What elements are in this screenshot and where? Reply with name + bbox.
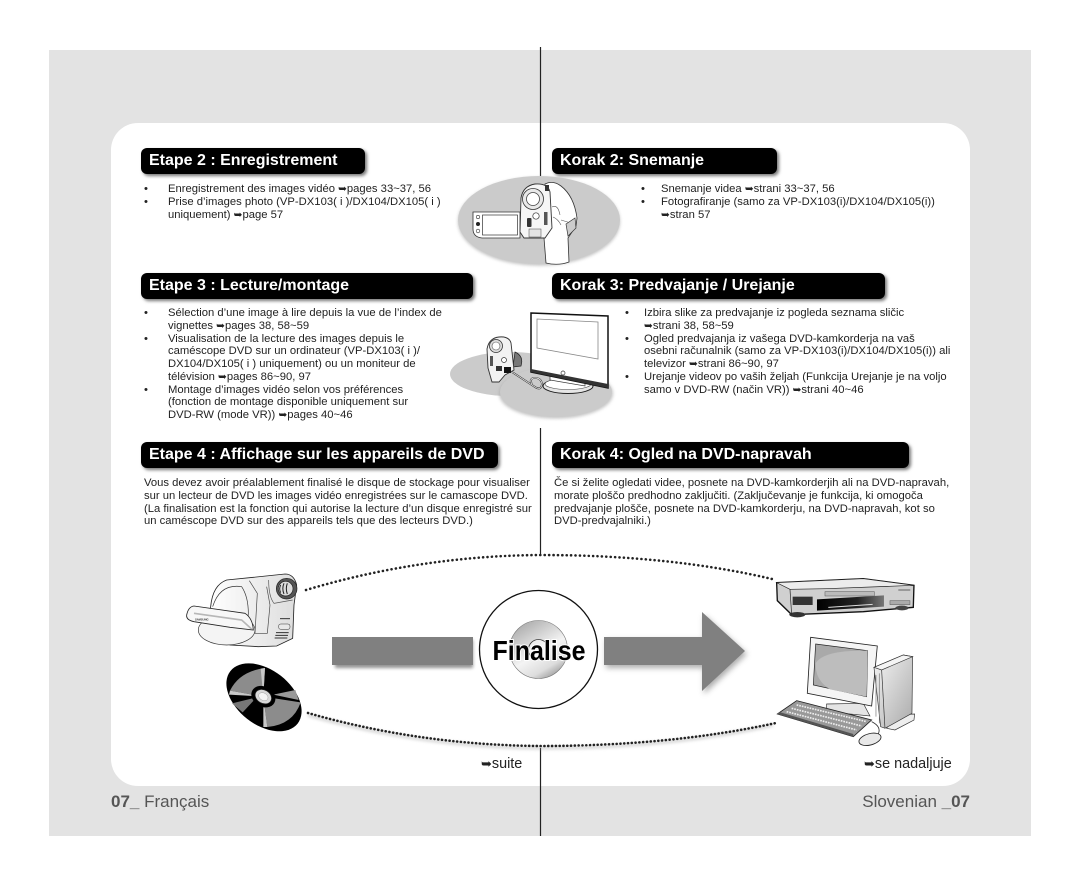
text: • xyxy=(641,183,645,195)
TV stand xyxy=(543,378,593,394)
heading: Etape 3 xyxy=(141,273,473,299)
text: • xyxy=(144,332,148,344)
disc with Finalise label xyxy=(480,590,598,708)
text: Etape 4 paragraph: Vous devez avoir préalablement finalisé le disque de stockage pour visualiser sur un lecteur de DVD les images vidéo enregistrées sur le camascope DVD. (La finalisation est la fonction qui autorise la lecture d’un disque enregistré sur un caméscope DVD sur des appareils tels que des lecteurs DVD.) xyxy=(144,477,532,527)
heading: Korak 2: Korak 2: Snemanje xyxy=(560,152,704,169)
text: Etape 2 list: Enregistrement des images vidéo ➥pages 33~37, 56 Prise d’images photo (VP-DX103( i )/DX104/DX105( i ) uniquement) ➥page 57 xyxy=(168,183,441,220)
text: • xyxy=(625,332,629,344)
heading: Etape 4 xyxy=(141,442,498,468)
flip-out LCD xyxy=(473,212,520,238)
wrist and hand xyxy=(544,182,577,264)
text: Korak 3 list: Izbira slike za predvajanje iz pogleda seznama sličic ➥strani 38, 58~59 Ogled predvajanja iz vašega DVD-kamkorderja na vaš osebni računalnik (samo za VP-DX103(i)/DX104/DX105(i)) ali televizor ➥strani 86~90, 97 Urejanje videov po vaših željah (Funkcija Urejanje je na voljo samo v DVD-RW (način VR)) ➥strani 40~46 xyxy=(644,307,950,396)
text: • xyxy=(641,196,645,208)
icon: camcorder: SAMSUNG xyxy=(195,617,209,621)
icon: DVD disc xyxy=(214,650,314,745)
icon: camcorder xyxy=(187,574,297,647)
text: Korak 4 paragraph: Če si želite ogledati videe, posnete na DVD-kamkorderjih ali na DVD-napravah, morate ploščo predhodno zaključiti. (Zaključevanje je funkcija, ki omogoča predvajanje plošče, posnete na DVD-kamkorderju, na DVD-napravah, kot so DVD-predvajalniki.) xyxy=(554,477,949,527)
continue label: se nadaljuje: ➥se nadaljuje xyxy=(864,756,952,772)
text: Korak 2 list: Snemanje videa ➥strani 33~37, 56 Fotografiranje (samo za VP-DX103(i)/DX104/DX105(i)) ➥stran 57 xyxy=(661,183,935,220)
icon: desktop computer xyxy=(777,637,915,748)
footer: left page number: 07_ Français xyxy=(111,792,209,811)
heading: Etape 4: Etape 4 : Affichage sur les appareils de DVD xyxy=(149,446,485,463)
text: • xyxy=(144,196,148,208)
heading: Korak 3 xyxy=(552,273,885,299)
heading: Korak 3: Korak 3: Predvajanje / Urejanje xyxy=(560,277,795,294)
TV screen frame xyxy=(531,313,608,388)
heading: Korak 2 xyxy=(552,148,777,174)
cable xyxy=(512,372,542,388)
dotted ellipse: top arc xyxy=(306,555,772,590)
text: • xyxy=(144,384,148,396)
heading: Etape 2: Etape 2 : Enregistrement xyxy=(149,152,338,169)
text: • xyxy=(144,183,148,195)
heading: Korak 4 xyxy=(552,442,909,468)
white content panel xyxy=(111,123,970,786)
text: • xyxy=(144,307,148,319)
arrow: right arrow head and shaft xyxy=(604,612,747,694)
small camcorder xyxy=(513,352,522,367)
arrow: left shaft xyxy=(332,637,473,668)
disc with Finalise label: Finalise xyxy=(492,635,586,666)
text: Etape 3 list: Sélection d’une image à lire depuis la vue de l’index de vignettes ➥pages 38, 58~59 Visualisation de la lecture des images depuis le caméscope DVD sur un ordinateur (VP-DX103( i )/ DX104/DX105( i ) uniquement) ou un moniteur de télévision ➥pages 86~90, 97 Montage d’images vidéo selon vos préférences (fonction de montage disponible uniquement sur DVD-RW (mode VR)) ➥pages 40~46 xyxy=(168,307,442,421)
camcorder body xyxy=(520,184,552,238)
icon: DVD player xyxy=(777,579,914,617)
text: • xyxy=(625,371,629,383)
heading: Korak 4: Korak 4: Ogled na DVD-napravah xyxy=(560,446,812,463)
icon: camcorder held in hand on grey ellipse xyxy=(458,176,620,266)
continue label: suite: ➥suite xyxy=(481,756,522,772)
heading: Etape 3: Etape 3 : Lecture/montage xyxy=(149,277,349,294)
text: • xyxy=(625,307,629,319)
footer: right page number: Slovenian _07 xyxy=(862,792,970,811)
heading: Etape 2 xyxy=(141,148,365,174)
icon: camcorder connected to television on grey shapes xyxy=(450,313,613,418)
dotted ellipse: bottom arc with shadow xyxy=(308,713,776,748)
